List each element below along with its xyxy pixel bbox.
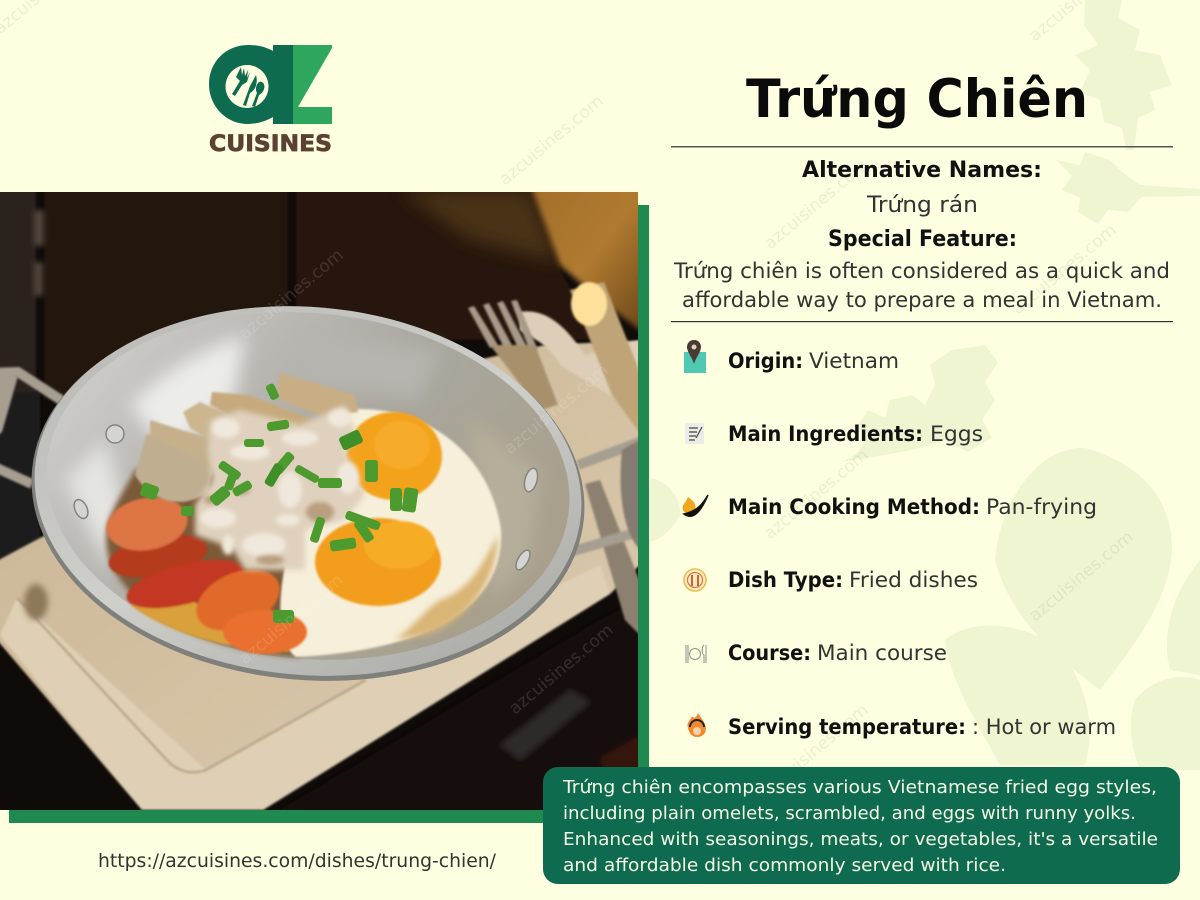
row: serving temperature [728, 715, 1116, 739]
text block: special feature: Special Feature: [828, 227, 1017, 252]
dark shadow under food [106, 460, 300, 657]
icon: hot dish flame [688, 713, 706, 737]
photo watermarks [235, 245, 617, 719]
photo watermarks: azcuisines.com [235, 570, 347, 669]
photo watermarks: azcuisines.com [500, 360, 612, 459]
title: Trứng Chiên [746, 69, 1088, 130]
row: main cooking method: Main Cooking Method: [728, 495, 980, 519]
row: main ingredients: Eggs [930, 422, 983, 446]
row: origin: Vietnam [809, 349, 899, 373]
pan body [32, 306, 584, 681]
knife [570, 282, 645, 640]
row: course: Main course [817, 641, 947, 665]
logo: AZ Cuisines [209, 45, 332, 157]
callout: description: Enhanced with seasonings, meats, or vegetables, it's a versatile [563, 829, 1158, 850]
pan handles [0, 372, 645, 552]
source url: https://azcuisines.com/dishes/trung-chien/ [98, 850, 497, 872]
row: course [728, 641, 947, 665]
photo watermarks: azcuisines.com [235, 245, 347, 344]
icon: frying pan [683, 495, 708, 516]
icon: place setting [686, 645, 706, 663]
pan rivets [71, 425, 540, 572]
table backdrop [0, 170, 660, 830]
callout: description: Trứng chiên encompasses various Vietnamese fried egg styles, [562, 777, 1157, 798]
decorative leaves [650, 0, 1200, 770]
logo mark letter a [209, 45, 293, 124]
row: dish type [728, 568, 978, 592]
text block: alternative names: Alternative Names: [802, 158, 1042, 183]
logo letter z [293, 45, 332, 124]
row: dish type: Fried dishes [849, 568, 978, 592]
row: origin [728, 349, 899, 373]
text block: special feature [673, 227, 1170, 312]
row: serving temperature: Serving temperature: [728, 715, 966, 739]
green photo frame [9, 205, 649, 823]
watermarks: azcuisines.com [760, 155, 872, 254]
row: main ingredients: Main Ingredients: [728, 422, 923, 446]
row: serving temperature: : Hot or warm [972, 715, 1116, 739]
pan highlights [65, 330, 540, 600]
text block: alternative names: Trứng rán [866, 193, 978, 218]
watermarks: azcuisines.com [760, 445, 872, 544]
watermarks: azcuisines.com [760, 700, 872, 799]
row: origin: Origin: [728, 349, 803, 373]
egg whites [280, 409, 501, 657]
egg yolks [315, 412, 442, 606]
watermarks: azcuisines.com [495, 91, 607, 190]
red sausage slices [102, 491, 307, 654]
board cutout [518, 310, 638, 397]
icon: plate with cutlery [684, 569, 706, 591]
logo wordmark: CUISINES [209, 132, 332, 157]
text block: alternative names [802, 158, 1042, 218]
callout: description [543, 767, 1180, 884]
row: dish type: Dish Type: [728, 568, 843, 592]
fork [468, 300, 558, 410]
photo: fried eggs in a pan [0, 170, 660, 830]
logo utensils [232, 67, 264, 107]
icon: notes [685, 423, 704, 444]
watermarks: azcuisines.com [1008, 220, 1120, 319]
watermarks: azcuisines.com [1025, 527, 1137, 626]
minced pork [195, 405, 365, 570]
icon: location pin [684, 340, 706, 373]
callout: description: including plain omelets, scrambled, and eggs with runny yolks. [563, 803, 1136, 824]
text block: special feature: Trứng chiên is often considered as a quick and [673, 259, 1170, 283]
text block: special feature: affordable way to prepare a meal in Vietnam. [682, 288, 1162, 312]
pale sliced sausage [135, 373, 358, 502]
wooden board [0, 340, 650, 810]
row: course: Course: [728, 641, 811, 665]
callout: description: and affordable dish commonly served with rice. [563, 855, 1006, 876]
green onions [139, 383, 419, 623]
photo watermarks: azcuisines.com [505, 620, 617, 719]
row: main cooking method: Pan-frying [986, 495, 1097, 519]
